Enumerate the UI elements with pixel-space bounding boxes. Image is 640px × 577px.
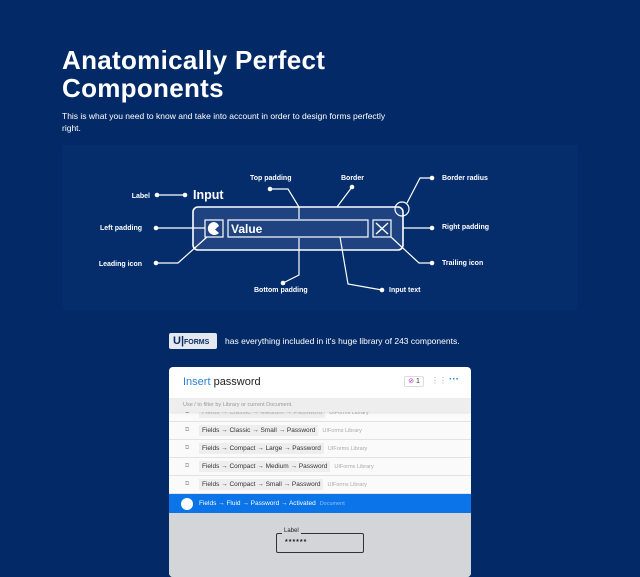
result list: UIForms Library	[334, 464, 374, 470]
input box	[193, 207, 403, 250]
result list: UIForms Library	[322, 428, 362, 434]
tagline: has everything included in it's huge library of 243 components.	[225, 336, 460, 346]
preview area: ******	[285, 539, 307, 546]
panel: insert password card: ⊘ 1	[408, 378, 420, 385]
panel: anatomy diagram: Input	[193, 188, 224, 202]
panel: anatomy diagram: Label	[132, 193, 150, 200]
panel: anatomy diagram: Border radius	[442, 175, 488, 182]
panel: insert password card: ⋮⋮	[431, 376, 447, 385]
panel: anatomy diagram: Left padding	[100, 225, 142, 232]
result list: Fields → Compact → Small → Password	[202, 481, 320, 488]
result list: ⧉	[185, 481, 189, 487]
title: Anatomically Perfect	[62, 45, 325, 75]
preview area: Label	[284, 528, 299, 534]
result list: Fields → Fluid → Password → Activated	[199, 500, 316, 507]
panel: anatomy diagram: Top padding	[250, 175, 291, 182]
result list: Document	[320, 500, 345, 506]
panel: anatomy diagram: Trailing icon	[442, 260, 483, 267]
preview area	[169, 513, 471, 577]
result list: ⧉	[185, 445, 189, 451]
panel: anatomy diagram: Right padding	[442, 224, 489, 231]
logo badge: UIForms: U|FORMS	[173, 335, 209, 347]
logo badge: UIForms	[169, 333, 217, 349]
search bar	[169, 398, 471, 412]
result list: Fields → Compact → Large → Password	[202, 445, 321, 452]
result list: Fields → Compact → Medium → Password	[202, 463, 327, 470]
panel: anatomy diagram: Bottom padding	[254, 287, 308, 294]
title	[62, 45, 325, 103]
result list: UIForms Library	[328, 446, 367, 452]
title: Components	[62, 73, 224, 103]
result list: ⧉	[185, 427, 189, 433]
panel: anatomy diagram: Value	[231, 222, 263, 236]
result list: UIForms Library	[327, 482, 367, 488]
result list: Fields → Classic → Small → Password	[202, 427, 315, 434]
panel: anatomy diagram: Input text	[389, 287, 421, 294]
panel: anatomy diagram	[99, 174, 489, 294]
subtitle: This is what you need to know and take into account in order to design forms perfectly right.	[62, 111, 385, 133]
panel: anatomy diagram: Border	[341, 175, 364, 182]
result list	[169, 412, 471, 513]
search bar: Use / to filter by Library or current Document.	[183, 402, 293, 408]
panel: insert password card	[169, 367, 471, 577]
result list: ⧉	[185, 463, 189, 469]
card header: Insert password	[183, 376, 261, 388]
panel: insert password card: ···	[449, 374, 459, 385]
panel: anatomy diagram: Leading icon	[99, 261, 142, 268]
